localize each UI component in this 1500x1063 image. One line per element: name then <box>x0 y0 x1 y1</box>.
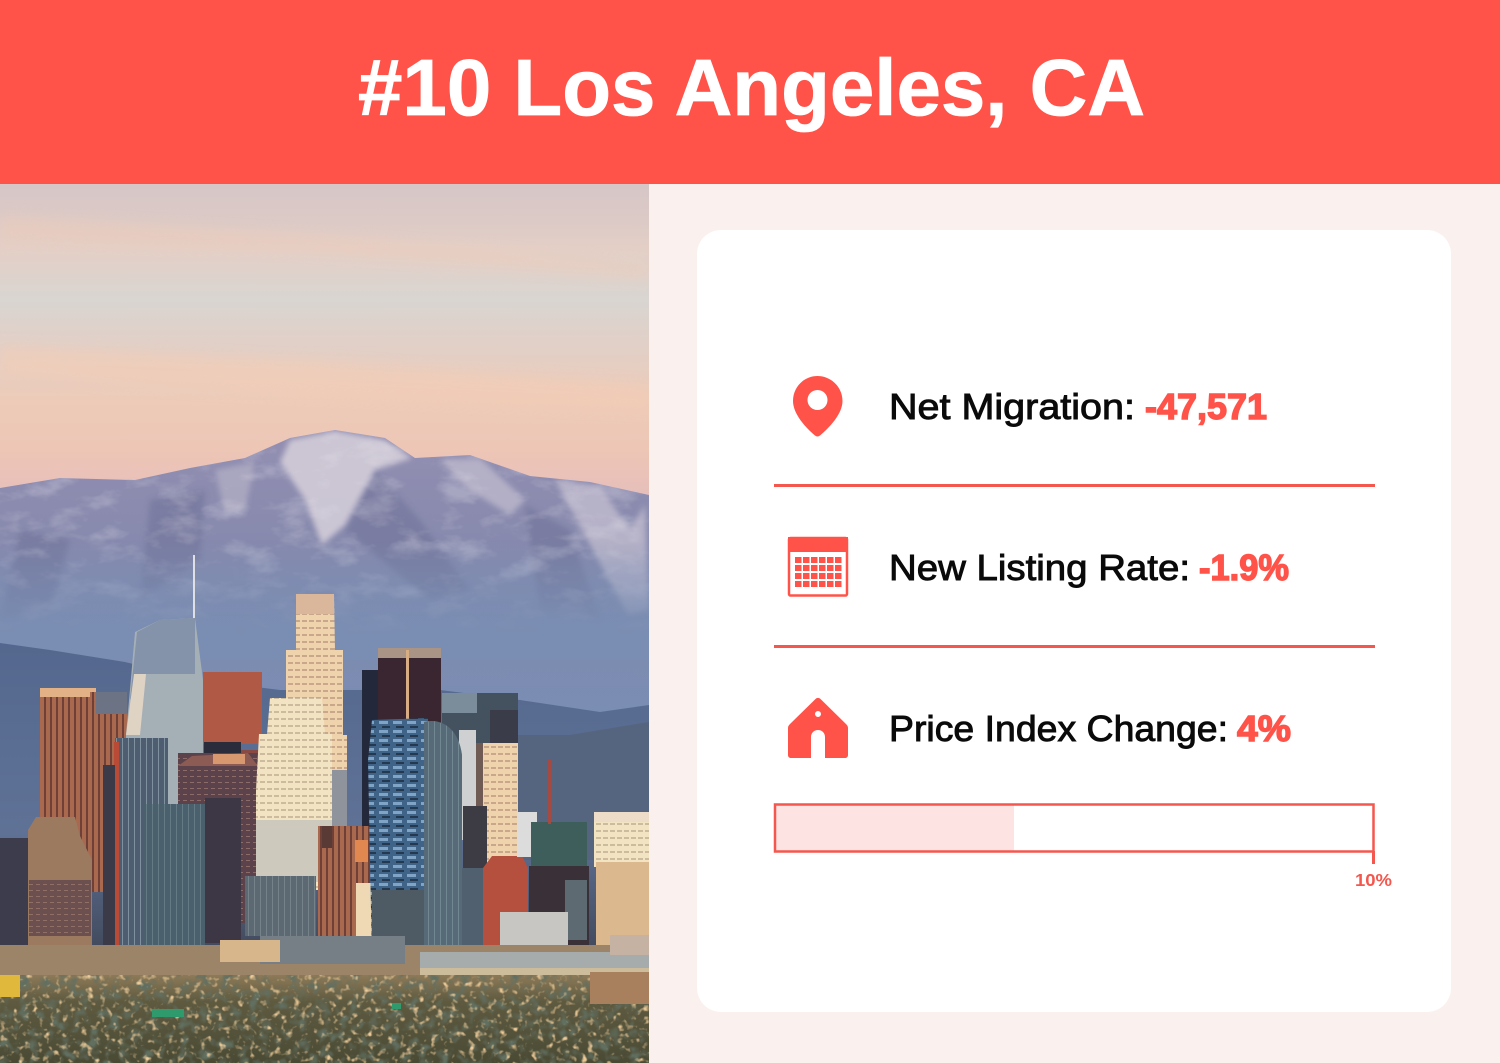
teal glass low tower <box>143 804 205 949</box>
glass left tower <box>115 738 168 948</box>
foothills <box>0 643 649 960</box>
Wilshire Grand <box>126 618 203 804</box>
blue wave tower <box>368 718 428 960</box>
red-brick tower <box>203 672 262 744</box>
stats card <box>697 230 1451 1012</box>
snow streaks <box>215 431 649 615</box>
low-rise foreground buildings <box>0 935 649 976</box>
left classic low block <box>0 838 30 948</box>
neighborhood and trees <box>0 972 649 1063</box>
brick mid tower <box>178 753 258 923</box>
label: new listing rate: New Listing Rate: <box>889 547 1190 588</box>
mountain shadow folds <box>14 474 582 581</box>
US Bank Tower <box>286 596 347 770</box>
photo: Los Angeles skyline with mountain <box>0 184 649 1063</box>
header banner <box>0 0 1500 184</box>
icon: map pin <box>793 376 842 436</box>
pale front tower <box>256 698 332 890</box>
sky <box>0 184 649 504</box>
spire <box>193 555 195 625</box>
value: net migration: -47,571 <box>1145 386 1267 427</box>
orange-brick low tower <box>318 826 370 938</box>
skyscrapers <box>0 555 649 960</box>
icon: calendar <box>788 537 848 596</box>
value: new listing rate: -1.9% <box>1199 547 1289 588</box>
far glass block <box>442 693 518 743</box>
stat: price index change <box>788 698 1291 758</box>
left brown tower <box>40 697 90 856</box>
value: price index change: 4% <box>1237 708 1291 749</box>
label: net migration: Net Migration: <box>889 386 1135 427</box>
divider <box>774 484 1375 487</box>
stat: net migration <box>793 376 1267 436</box>
label: price index change: Price Index Change: <box>889 708 1228 749</box>
dark tower <box>362 670 378 830</box>
right cluster <box>462 868 483 945</box>
icon: house <box>788 698 848 758</box>
scale label: 10% <box>1355 870 1392 890</box>
mountain range <box>0 430 649 720</box>
title: #10 Los Angeles, CA <box>358 43 1145 132</box>
divider <box>774 645 1375 648</box>
pale tall tower right <box>459 730 476 840</box>
progress bar: 4% of 10% <box>775 804 1392 890</box>
stat: new listing rate <box>788 537 1289 596</box>
